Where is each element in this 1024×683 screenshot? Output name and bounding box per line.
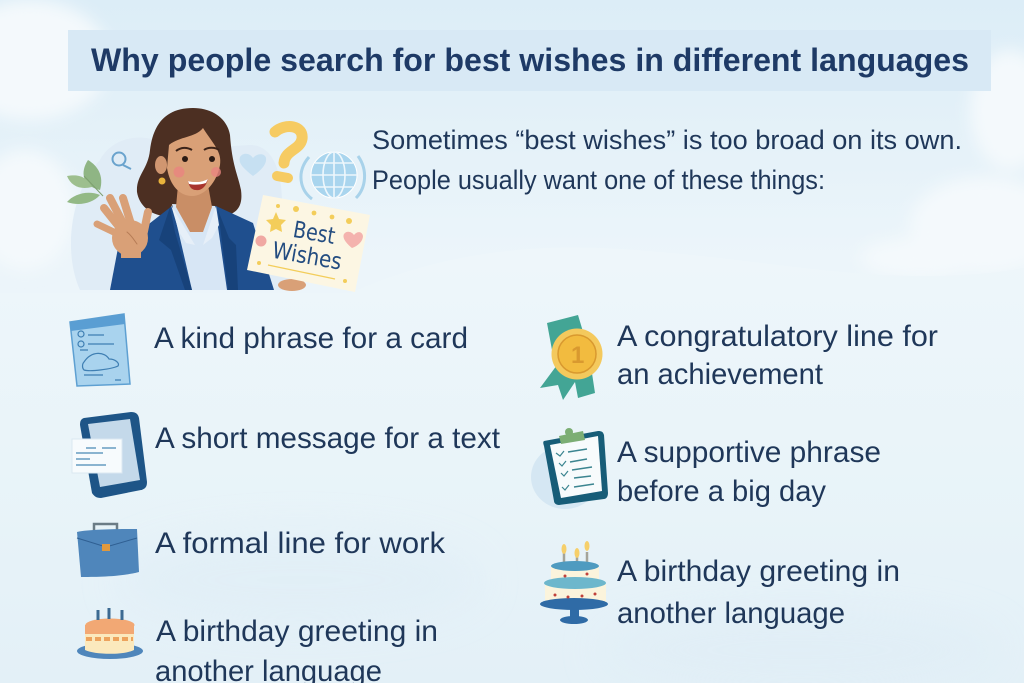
item text: another language <box>617 597 845 630</box>
card text: Wishes <box>270 238 344 276</box>
list item: birthday right <box>540 541 900 630</box>
hair <box>137 108 241 216</box>
illustration: woman holding Best Wishes card <box>67 108 370 292</box>
item text: A birthday greeting in <box>617 555 900 588</box>
intro text: People usually want one of these things: <box>372 165 825 195</box>
card text <box>270 214 348 276</box>
list item: birthday left <box>77 608 438 683</box>
card stars <box>257 204 352 283</box>
icon: medal <box>540 315 602 400</box>
card text: Best <box>291 217 337 250</box>
item text <box>155 615 438 683</box>
icon: magnifier <box>112 152 131 169</box>
lapels <box>159 207 238 290</box>
icon: globe <box>301 152 365 199</box>
icon: clipboard <box>531 428 608 509</box>
item text: A kind phrase for a card <box>154 322 468 355</box>
list item: work line <box>77 524 445 577</box>
shirt <box>172 204 227 290</box>
Best Wishes card <box>247 195 370 292</box>
card heart <box>343 232 363 248</box>
item text <box>617 320 938 391</box>
item text: an achievement <box>617 358 823 391</box>
title banner <box>68 30 991 91</box>
icon: heart <box>240 154 266 176</box>
item text <box>617 555 900 630</box>
icon: question mark <box>275 127 302 178</box>
item text: A birthday greeting in <box>156 615 438 648</box>
icon: card document <box>70 314 130 386</box>
list item: text message <box>72 412 500 498</box>
card flower <box>256 236 266 246</box>
item text: A supportive phrase <box>617 436 881 469</box>
icon: tablet with message <box>72 412 147 498</box>
icon: leaves <box>67 160 103 204</box>
blazer <box>110 206 274 290</box>
item text <box>617 436 881 508</box>
icon: medal: 1 <box>571 342 584 369</box>
ear and earring <box>155 156 167 184</box>
neck <box>176 185 212 232</box>
intro text <box>372 125 962 195</box>
card underline <box>268 265 335 279</box>
item text: before a big day <box>617 475 826 508</box>
intro text: Sometimes “best wishes” is too broad on its own. <box>372 125 962 155</box>
list item: card phrase <box>70 314 468 386</box>
face <box>167 128 220 196</box>
collar <box>171 205 219 245</box>
waving hand <box>97 198 148 258</box>
item text: A formal line for work <box>155 527 445 560</box>
hand holding card <box>278 279 306 291</box>
background blobs <box>71 138 300 290</box>
icon: briefcase <box>77 524 139 577</box>
item text: A short message for a text <box>155 422 500 455</box>
title: Why people search for best wishes in different languages <box>91 42 969 78</box>
list item: big day <box>531 428 881 509</box>
icon: tiered cake <box>540 541 608 624</box>
facial features <box>174 148 221 190</box>
item text: A congratulatory line for <box>617 320 938 353</box>
icon: cake small <box>77 608 143 659</box>
list item: achievement <box>540 315 938 400</box>
